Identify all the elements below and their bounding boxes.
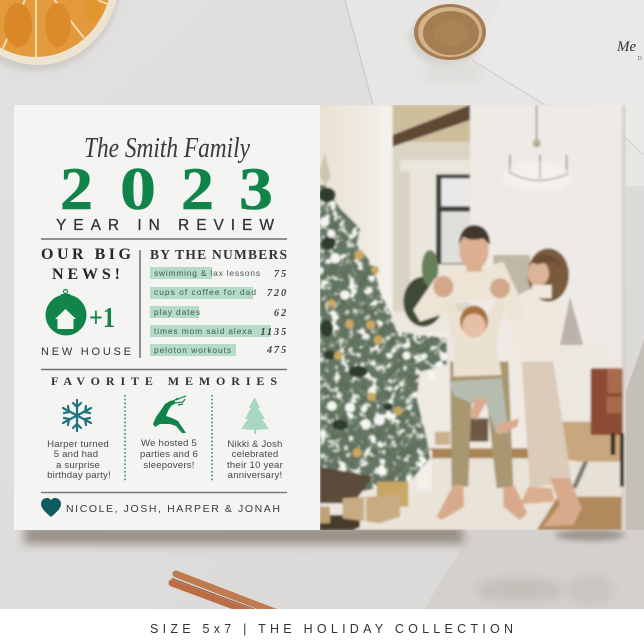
- memory: Harper birthday: 5 and had: [54, 449, 98, 460]
- section: our big news: [41, 246, 132, 358]
- photo: family by the Christmas tree: [319, 105, 626, 530]
- memory: Harper birthday: birthday party!: [47, 470, 111, 481]
- memory: anniversary: their 10 year: [227, 460, 284, 471]
- text: family names: NICOLE, JOSH, HARPER & JONAH: [66, 503, 280, 515]
- alcove and beam: [392, 140, 470, 312]
- sofa: [591, 368, 623, 435]
- card shadow: [24, 526, 464, 544]
- window: [436, 174, 470, 264]
- divider: dotted left: [124, 395, 126, 481]
- memory: Harper birthday: Harper turned: [47, 439, 109, 450]
- wall boxes: [435, 432, 450, 445]
- heading: our big news: [41, 246, 132, 283]
- footer text: SIZE 5x7 | THE HOLIDAY COLLECTION: [150, 622, 513, 636]
- label: new house: NEW HOUSE: [41, 346, 131, 358]
- lower wall: [413, 358, 557, 448]
- subtitle: year in review: YEAR IN REVIEW: [56, 217, 274, 234]
- illustration: decorated tree: [319, 185, 448, 502]
- logo mark: Me: [616, 39, 636, 55]
- icon: snowflake: [63, 400, 91, 431]
- illustration: child: [446, 298, 519, 435]
- decoration: cinnamon sticks: [172, 574, 275, 612]
- memory: Harper birthday: [47, 439, 111, 481]
- chandelier: [508, 105, 568, 180]
- section: by the numbers: [150, 247, 288, 356]
- stat: peloton workouts: 475: [266, 345, 288, 356]
- stat: play dates: [150, 306, 288, 319]
- icon: leaping reindeer: [153, 396, 186, 433]
- stat: peloton workouts: peloton workouts: [154, 345, 231, 355]
- footer band: [0, 609, 644, 644]
- tree top star: [320, 153, 331, 185]
- memory: hosted parties: sleepovers!: [143, 460, 195, 471]
- right wall: [471, 105, 623, 358]
- heading: our big news: OUR BIG: [41, 246, 132, 263]
- heading: favorite memories: FAVORITE MEMORIES: [51, 374, 277, 388]
- title: year 2023: 2: [181, 156, 214, 222]
- stat: times mom said alexa: [150, 325, 288, 338]
- stat: play dates: play dates: [154, 307, 200, 317]
- stat: swimming and lax lessons: swimming & lax lessons: [154, 268, 260, 278]
- stat: swimming and lax lessons: 75: [274, 269, 288, 280]
- title: year 2023: [60, 156, 273, 223]
- panel: card text side: [14, 105, 320, 530]
- memory: hosted parties: parties and 6: [140, 449, 198, 460]
- stat: cups of coffee for dad: [150, 287, 288, 299]
- cabinet: [550, 345, 610, 422]
- icon: ornament with house: [46, 290, 86, 336]
- stat: times mom said alexa: 1135: [260, 327, 288, 338]
- title: year 2023: 3: [239, 156, 273, 222]
- stat: play dates: 62: [274, 308, 288, 319]
- stat: peloton workouts: [150, 344, 288, 356]
- text: plus one: +1: [89, 302, 115, 334]
- decoration: dried orange slice: [0, 0, 120, 71]
- envelope paper: [345, 0, 644, 186]
- floor: [562, 420, 622, 463]
- decoration: linen cloth: [424, 340, 644, 609]
- left wall: [320, 106, 334, 188]
- title: year 2023: 2: [60, 156, 93, 222]
- stat: times mom said alexa: times mom said alexa: [154, 326, 252, 336]
- stat: cups of coffee for dad: 720: [267, 288, 288, 299]
- title: year 2023: 0: [120, 156, 156, 223]
- memory: anniversary: Nikki & Josh: [227, 439, 283, 450]
- memory: Harper birthday: a surprise: [56, 460, 100, 471]
- memory: anniversary: [227, 439, 284, 481]
- stat: swimming and lax lessons: [150, 267, 288, 280]
- logo mark: [616, 39, 642, 62]
- windowsill plant: [403, 277, 443, 327]
- logo mark: D: [638, 56, 642, 62]
- decoration: gold wax seal: [409, 4, 486, 65]
- illustration: man: [413, 225, 527, 520]
- memory: anniversary: anniversary!: [228, 470, 282, 481]
- heading: our big news: NEWS!: [52, 266, 120, 283]
- memory: anniversary: celebrated: [232, 449, 278, 460]
- illustration: woman: [505, 248, 582, 527]
- script heading: family name: The Smith Family: [84, 132, 250, 164]
- memory: hosted parties: [140, 438, 198, 471]
- stat: cups of coffee for dad: cups of coffee for dad: [154, 287, 256, 297]
- divider: dotted right: [211, 395, 213, 481]
- icon: pine tree: [241, 397, 269, 434]
- memory: hosted parties: We hosted 5: [141, 438, 197, 449]
- icon: heart: [41, 498, 61, 517]
- heading: by the numbers: BY THE NUMBERS: [150, 247, 287, 262]
- illustration: gifts under tree: [320, 467, 408, 523]
